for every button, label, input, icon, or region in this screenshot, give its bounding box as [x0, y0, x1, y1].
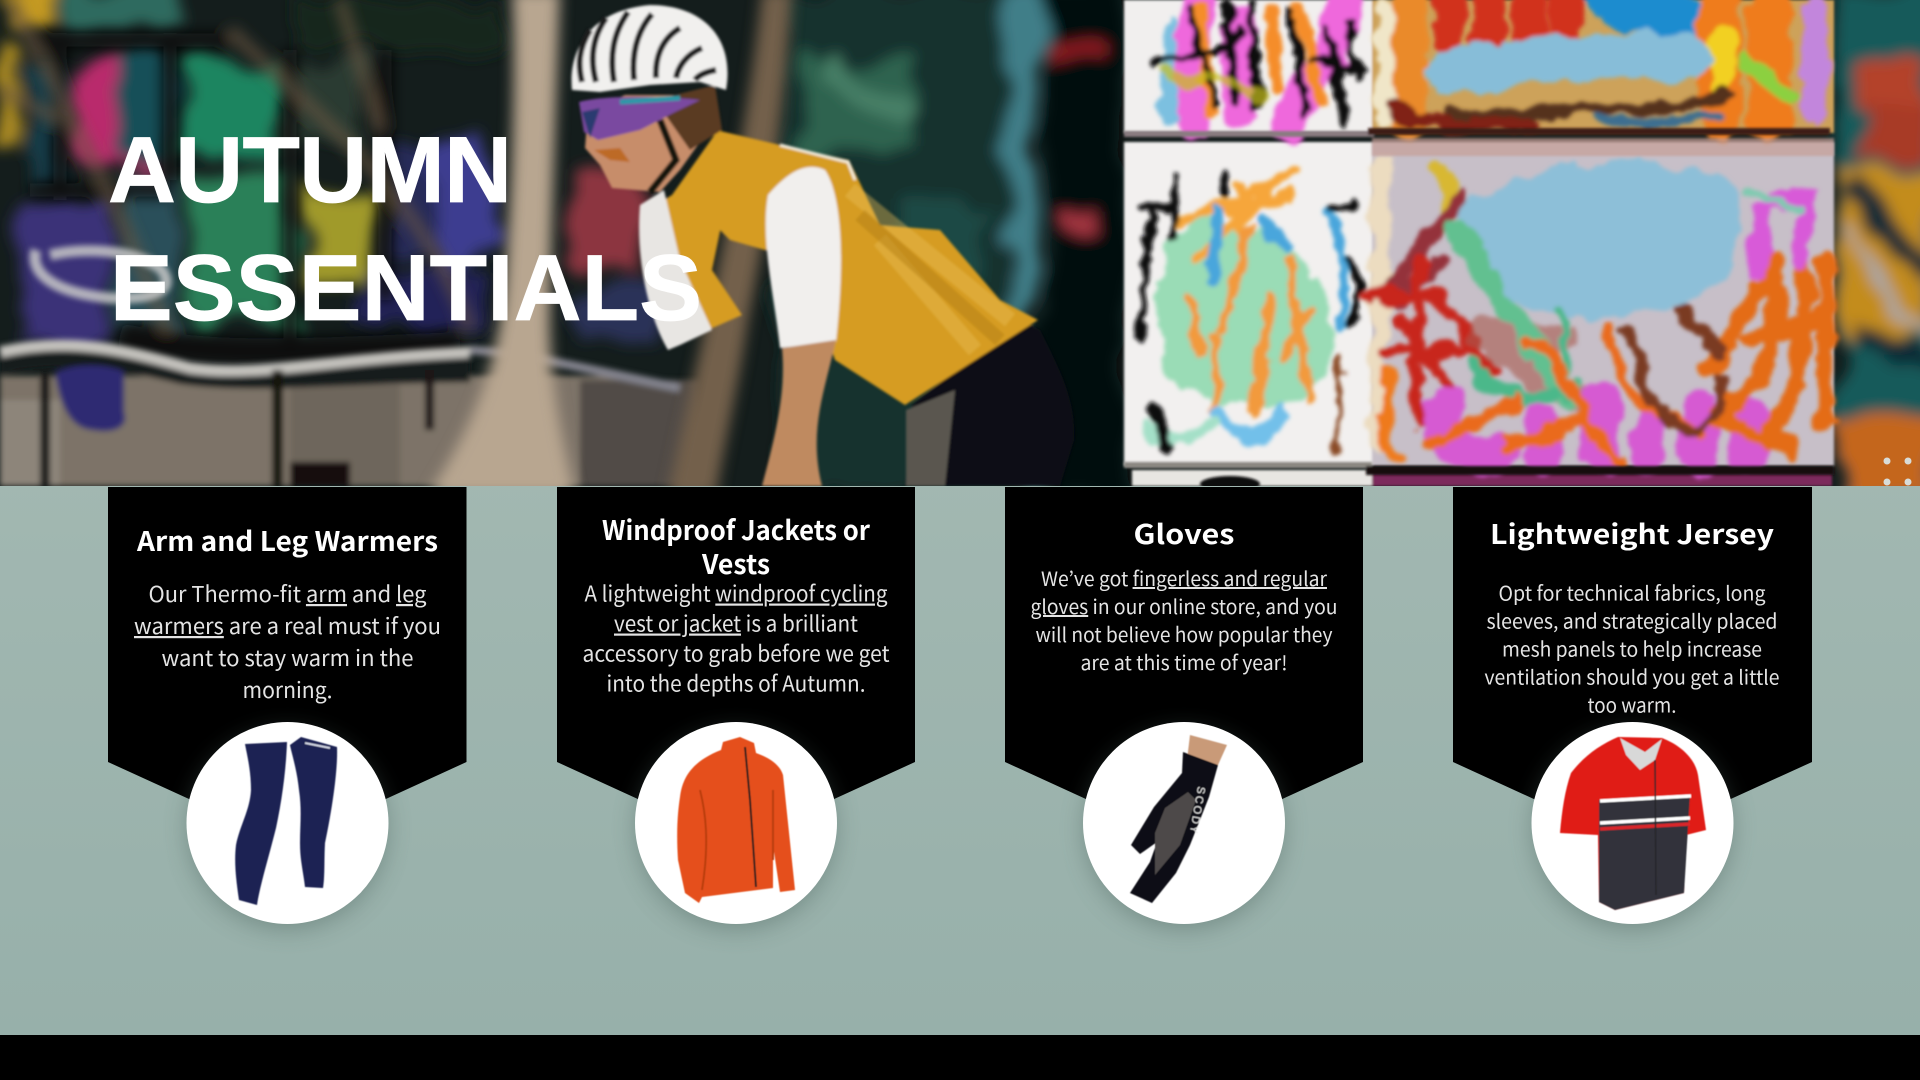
body text: gloves: We’ve got fingerless and regular — [1041, 563, 1327, 592]
body text: windproof jackets: vest or jacket is a brilliant — [614, 606, 858, 638]
dark drips and blurred branches over the left graffiti — [0, 0, 470, 351]
body text: lightweight jersey: too warm. — [1588, 690, 1676, 718]
background middle, right of the rider — [780, 0, 1126, 500]
body text: windproof jackets: A lightweight windproof cycling — [584, 576, 888, 608]
icon: glove — [1130, 735, 1227, 903]
concrete blocks — [1124, 0, 1834, 486]
body text: windproof jackets: accessory to grab before we get — [582, 636, 890, 668]
product circle shadow — [636, 729, 836, 929]
helmet strap — [650, 120, 676, 192]
graffiti on concrete — [1140, 0, 1825, 460]
heading: gloves: Gloves — [1134, 513, 1234, 552]
neck and face — [585, 95, 705, 192]
product circle — [635, 722, 837, 924]
moustache — [594, 148, 630, 162]
product circle shadow — [1532, 729, 1732, 929]
panel: gloves — [1005, 487, 1363, 929]
sunglasses — [579, 97, 700, 140]
wall joints — [1124, 128, 1834, 492]
near arm — [762, 340, 836, 486]
body text: gloves: will not believe how popular they — [1036, 619, 1333, 648]
cyclist — [572, 5, 1074, 486]
body text: lightweight jersey — [1484, 578, 1780, 718]
panel: lightweight jersey — [1453, 487, 1812, 929]
body text: lightweight jersey: Opt for technical fabrics, long — [1498, 578, 1766, 606]
product circle — [1083, 722, 1285, 924]
product circle shadow — [1084, 729, 1284, 929]
black shorts — [905, 320, 1074, 486]
body text: arm and leg warmers: warmers are a real must if you — [134, 609, 441, 641]
product circle — [186, 722, 388, 924]
body text: gloves: are at this time of year! — [1080, 647, 1288, 676]
body text: lightweight jersey: ventilation should you get a little — [1484, 662, 1780, 690]
yellow vest — [690, 130, 1038, 405]
product circle — [1532, 722, 1734, 924]
icon: leg warmers — [235, 737, 337, 905]
lower left block — [1165, 225, 1325, 400]
body text: arm and leg warmers: Our Thermo-fit arm and leg — [148, 577, 427, 609]
panel: arm and leg warmers — [108, 487, 466, 929]
body text: arm and leg warmers — [134, 577, 441, 705]
far white sleeve — [639, 190, 712, 350]
helmet — [572, 5, 728, 92]
concrete base — [0, 250, 700, 486]
body text: windproof jackets — [582, 576, 890, 698]
heading: lightweight jersey: Lightweight Jersey — [1490, 513, 1775, 552]
icon: glove: SCODY — [1187, 785, 1207, 836]
body text: arm and leg warmers: morning. — [242, 673, 332, 705]
right edge of the photo — [1836, 0, 1920, 500]
heading: windproof jackets — [602, 509, 870, 582]
upper coloured block — [1376, 10, 1394, 115]
hero photo: cyclist in front of graffiti wall — [0, 0, 1920, 500]
heading: arm and leg warmers: Arm and Leg Warmers — [136, 520, 438, 559]
slider dots — [1884, 458, 1912, 486]
body text: lightweight jersey: mesh panels to help increase — [1502, 634, 1762, 662]
blurred tree trunks — [428, 0, 792, 496]
panel: windproof jackets or vests — [557, 487, 915, 929]
heading: windproof jackets: Vests — [701, 543, 770, 582]
product circle shadow — [188, 729, 388, 929]
icon: orange jacket — [677, 737, 795, 903]
body text: arm and leg warmers: want to stay warm in the — [162, 641, 414, 673]
heading: windproof jackets: Windproof Jackets or — [602, 509, 870, 548]
body text: lightweight jersey: sleeves, and strategically placed — [1486, 606, 1778, 634]
title — [108, 117, 702, 340]
bottom black band — [0, 1035, 1920, 1080]
title: AUTUMN — [108, 117, 512, 222]
body text: gloves — [1030, 563, 1338, 676]
icon: jersey — [1560, 737, 1706, 910]
graffiti background left — [0, 0, 655, 345]
upper left block — [1190, 0, 1345, 125]
body text: gloves: gloves in our online store, and you — [1030, 591, 1338, 620]
near white sleeve — [766, 167, 841, 348]
body text: windproof jackets: into the depths of Autumn. — [606, 666, 866, 698]
title: ESSENTIALS — [110, 235, 702, 340]
lower coloured block — [1370, 170, 1390, 440]
